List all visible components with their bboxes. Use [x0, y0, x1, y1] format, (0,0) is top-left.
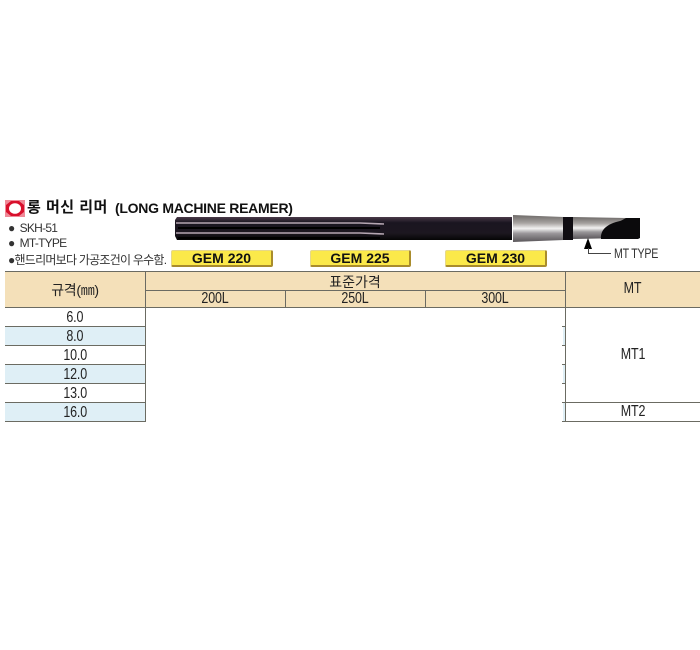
size row 16.0: 16.0	[63, 404, 87, 421]
header: size: 규격(㎜)	[51, 282, 99, 298]
feature list	[8, 221, 166, 267]
header: standard price: 표준가격	[329, 274, 381, 290]
size row 13.0: 13.0	[63, 385, 87, 402]
header: 300L: 300L	[481, 290, 509, 307]
size row 12.0	[5, 365, 145, 383]
title: 롱 머신 리머	[27, 199, 108, 216]
feature list: ●핸드리머보다 가공조건이 우수함.	[8, 253, 166, 267]
size row 8.0	[5, 327, 145, 345]
size row 10.0: 10.0	[63, 347, 87, 364]
header: 200L: 200L	[201, 290, 229, 307]
reamer tool illustration	[175, 215, 640, 242]
model badge: GEM 220	[171, 250, 273, 267]
model badge: GEM 225: GEM 225	[330, 250, 390, 266]
size row 12.0: 12.0	[63, 366, 87, 383]
title	[27, 199, 293, 216]
title: (LONG MACHINE REAMER)	[115, 200, 293, 216]
table header	[5, 271, 700, 308]
header: MT: MT	[624, 280, 641, 297]
MT2 cell: MT2	[621, 403, 645, 420]
model badge: GEM 230: GEM 230	[466, 250, 525, 266]
size row 6.0: 6.0	[67, 309, 83, 326]
label: MT TYPE: MT TYPE	[614, 245, 658, 261]
model badge: GEM 220: GEM 220	[192, 250, 251, 266]
model badge: GEM 230	[445, 250, 547, 267]
header: 250L: 250L	[341, 290, 369, 307]
feature list: ● MT-TYPE	[8, 236, 66, 250]
MT1 cell: MT1	[621, 346, 645, 363]
size row 16.0	[5, 403, 145, 421]
icon: section marker	[5, 200, 25, 217]
feature list: ● SKH-51	[8, 221, 57, 235]
size row 8.0: 8.0	[67, 328, 83, 345]
model badge: GEM 225	[310, 250, 411, 267]
arrow: MT type pointer	[584, 238, 611, 254]
